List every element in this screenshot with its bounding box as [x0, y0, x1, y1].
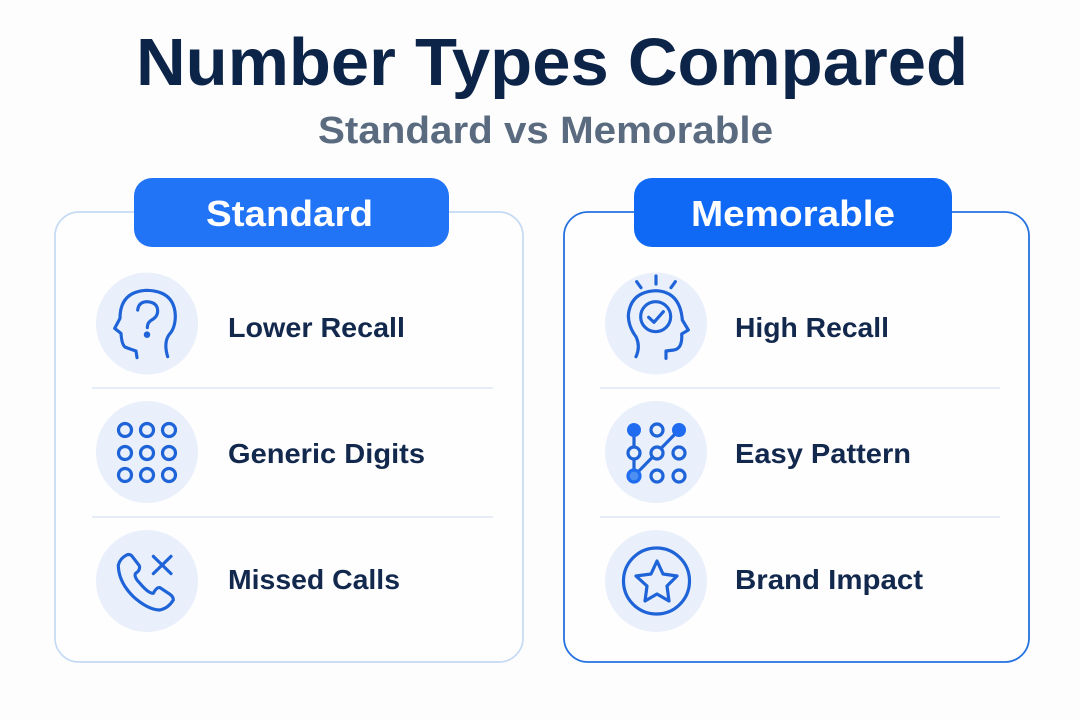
header: memorable: Memorable: [691, 193, 895, 234]
label: lower recall: Lower Recall: [228, 312, 405, 343]
header: memorable: [634, 178, 952, 247]
header: standard: Standard: [206, 193, 373, 234]
icon: keypad digits: [96, 401, 198, 503]
label: generic digits: Generic Digits: [228, 438, 425, 469]
icon: star badge: [605, 530, 707, 632]
panel: memorable: [564, 178, 1029, 662]
label: high recall: High Recall: [735, 312, 889, 343]
icon: head with check: [605, 272, 707, 374]
panel: standard: [55, 178, 523, 662]
icon: head with question mark: [96, 272, 198, 374]
label: brand impact: Brand Impact: [735, 564, 923, 595]
label: easy pattern: Easy Pattern: [735, 438, 911, 469]
subtitle: Standard vs Memorable: [318, 110, 773, 152]
title: Number Types Compared: [136, 25, 968, 100]
icon: missed call: [96, 530, 198, 632]
icon: easy pattern: [605, 401, 707, 503]
header: standard: [134, 178, 449, 247]
label: missed calls: Missed Calls: [228, 564, 400, 595]
